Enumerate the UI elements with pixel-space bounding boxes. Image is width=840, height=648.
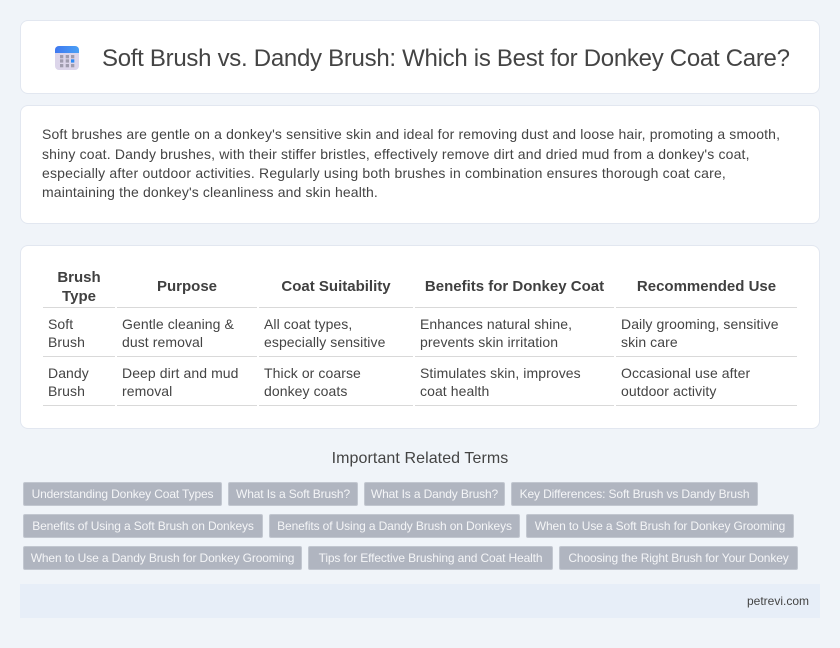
table row: soft brush: Daily grooming, sensitive — [621, 316, 779, 332]
table row: soft brush: Gentle cleaning & — [122, 316, 234, 332]
table row: dandy brush: removal — [122, 383, 172, 399]
table row: dandy brush: donkey coats — [264, 383, 347, 399]
table row: dandy brush: Occasional use after — [621, 365, 750, 381]
table row: soft brush: Enhances natural shine, — [420, 316, 572, 332]
title: Soft Brush vs. Dandy Brush: Which is Best for Donkey Coat Care? — [102, 45, 790, 72]
table row: dandy brush: Stimulates skin, improves — [420, 365, 581, 381]
table row: dandy brush: Dandy — [48, 365, 89, 381]
text block: introduction: shiny coat. Dandy brushes, with their stiffer bristles, effectively remove dirt and dried mud from a donkey's coat, — [42, 146, 750, 162]
text block: introduction: Soft brushes are gentle on a donkey's sensitive skin and ideal for removing dust and loose hair, promoting a smooth, — [42, 126, 780, 142]
table header: Type — [62, 288, 96, 305]
table row: soft brush: skin care — [621, 334, 678, 350]
table row: soft brush: prevents skin irritation — [420, 334, 558, 350]
table header: Brush — [57, 269, 101, 286]
text block: introduction: especially after outdoor activities. Regularly using both brushes in combination ensures thorough coat care, — [42, 165, 726, 181]
tag row 1 — [23, 482, 758, 506]
table header: Coat Suitability — [281, 278, 391, 295]
text block: introduction — [42, 126, 780, 200]
tag row 2: Benefits of Using a Dandy Brush on Donkeys — [277, 519, 512, 533]
tag row 1: Understanding Donkey Coat Types — [32, 487, 213, 501]
table row: dandy brush: Thick or coarse — [264, 365, 361, 381]
table row: soft brush — [43, 316, 797, 357]
panel: header — [20, 20, 820, 94]
tag row 2: Benefits of Using a Soft Brush on Donkeys — [32, 519, 254, 533]
tag row 1: What Is a Dandy Brush? — [371, 487, 498, 501]
footer — [20, 584, 820, 618]
table row: dandy brush — [43, 365, 797, 406]
table row: soft brush: Soft — [48, 316, 73, 332]
table header — [43, 269, 797, 308]
table row: soft brush: dust removal — [122, 334, 203, 350]
panel: introduction — [20, 105, 820, 224]
tag row 1: Key Differences: Soft Brush vs Dandy Brush — [520, 487, 749, 501]
table row: dandy brush: outdoor activity — [621, 383, 716, 399]
table header: Purpose — [157, 278, 217, 295]
table row: dandy brush: Deep dirt and mud — [122, 365, 239, 381]
table row: soft brush: All coat types, — [264, 316, 352, 332]
table row: dandy brush: Brush — [48, 383, 85, 399]
heading: related terms: Important Related Terms — [332, 450, 508, 467]
tag row 2 — [23, 514, 794, 538]
tag row 3: Tips for Effective Brushing and Coat Health — [319, 551, 542, 565]
tag row 3 — [23, 546, 798, 570]
tag row 1: What Is a Soft Brush? — [236, 487, 350, 501]
tag row 2: When to Use a Soft Brush for Donkey Grooming — [535, 519, 785, 533]
table header: Recommended Use — [637, 278, 776, 295]
tag row 3: When to Use a Dandy Brush for Donkey Grooming — [31, 551, 294, 565]
table row: soft brush: Brush — [48, 334, 85, 350]
tag row 3: Choosing the Right Brush for Your Donkey — [568, 551, 789, 565]
text block: introduction: maintaining the donkey's cleanliness and skin health. — [42, 184, 378, 200]
footer source text: petrevi.com — [747, 594, 809, 608]
table row: soft brush: especially sensitive — [264, 334, 385, 350]
panel: comparison table — [20, 245, 820, 429]
table row: dandy brush: coat health — [420, 383, 489, 399]
icon: calendar — [55, 46, 79, 70]
table header: Benefits for Donkey Coat — [425, 278, 604, 295]
